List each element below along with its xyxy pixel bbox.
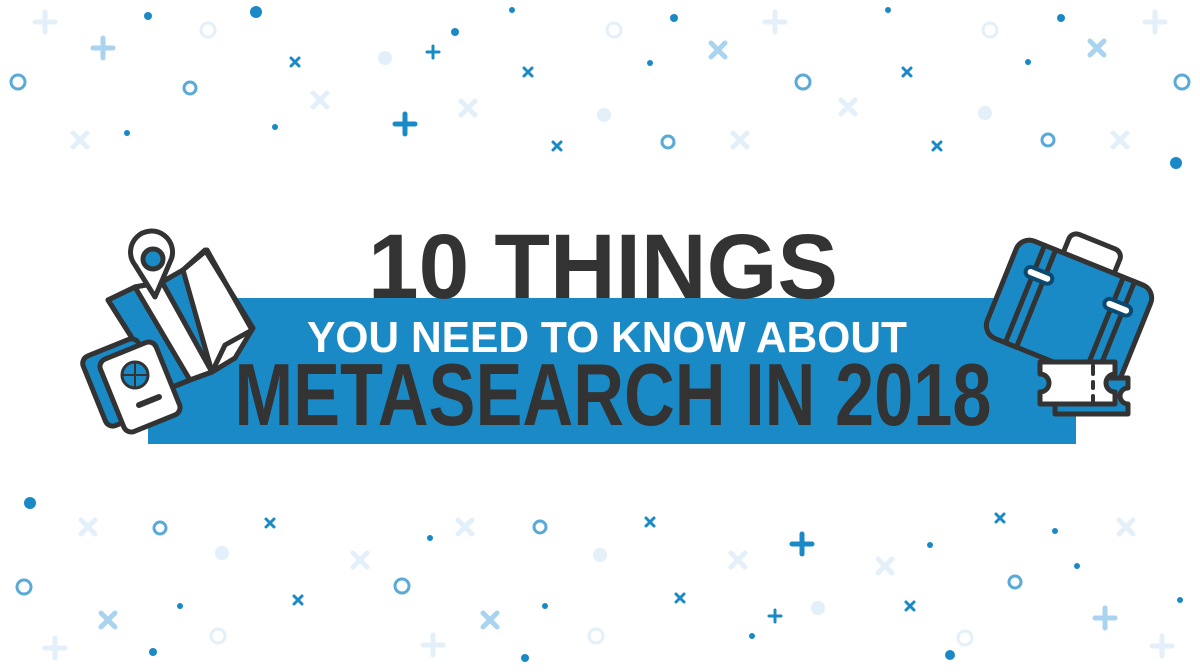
icon: map and passport <box>80 231 253 434</box>
background confetti bottom <box>17 497 1183 662</box>
icon: suitcase and ticket <box>982 215 1165 414</box>
subtitle: YOU NEED TO KNOW ABOUT <box>307 313 907 362</box>
title: 10 THINGS: 10 THINGS <box>368 216 838 318</box>
background confetti top <box>11 6 1189 169</box>
title: METASEARCH IN 2018: METASEARCH IN 2018 <box>234 345 992 444</box>
banner <box>148 298 1076 444</box>
